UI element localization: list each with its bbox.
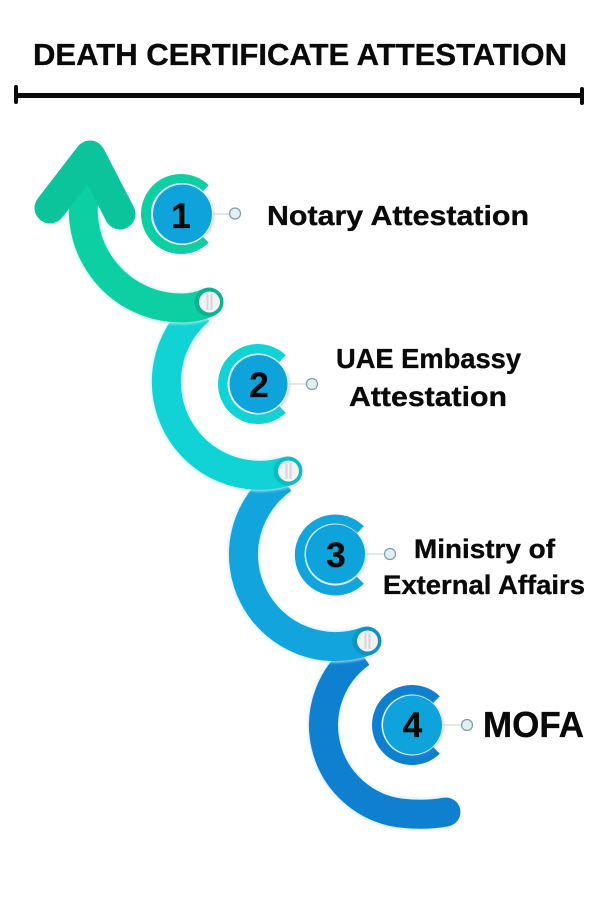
step 2 arc xyxy=(166,310,302,486)
step 3 handle xyxy=(352,626,382,656)
step 3 label: External Affairs xyxy=(383,570,585,600)
step 3 badge xyxy=(300,520,396,590)
step 2 badge xyxy=(223,349,318,419)
step 2 label xyxy=(336,343,521,412)
step 2 handle xyxy=(274,456,302,486)
step 1 badge: 1 xyxy=(171,197,191,236)
step 4 arc xyxy=(324,653,460,826)
arrow head xyxy=(50,156,120,214)
step 2 label: UAE Embassy xyxy=(336,343,521,374)
step 4 badge xyxy=(377,690,472,760)
step 1 label: Notary Attestation xyxy=(267,200,529,231)
step 3 arc xyxy=(243,479,382,656)
step 4 label: MOFA xyxy=(483,704,584,745)
step 3 label xyxy=(383,534,585,600)
step 3 badge: 3 xyxy=(326,536,346,575)
step 1 arc with arrow xyxy=(50,156,224,316)
step 1 badge xyxy=(146,179,240,249)
step 2 badge: 2 xyxy=(249,366,269,405)
step 1 handle xyxy=(194,288,224,316)
step 2 label: Attestation xyxy=(349,381,507,412)
title: DEATH CERTIFICATE ATTESTATION xyxy=(33,37,567,72)
step 3 label: Ministry of xyxy=(414,534,556,564)
step 4 badge: 4 xyxy=(403,706,423,745)
title rule xyxy=(14,85,584,105)
